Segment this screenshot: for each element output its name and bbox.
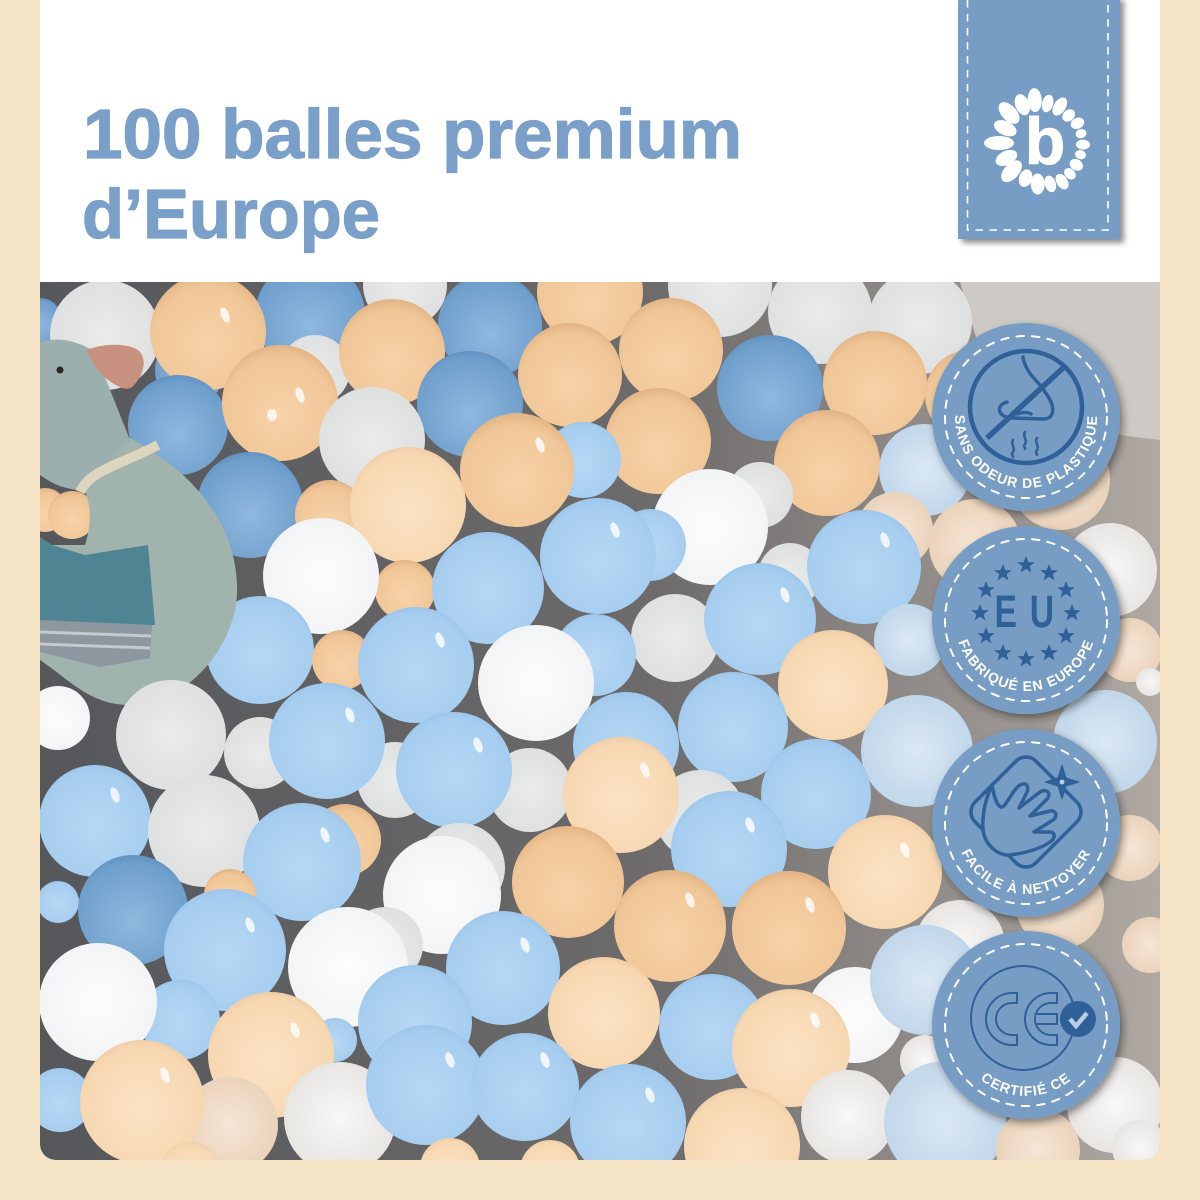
title: d’Europe	[82, 175, 380, 253]
icon: crossed-out nose	[970, 351, 1082, 463]
photo: ball pit with plush duck	[18, 233, 1178, 1200]
brand tag with flower logo	[958, 0, 1124, 243]
icon: EU stars: EU	[994, 587, 1054, 637]
badge: certifié CE	[930, 930, 1128, 1128]
badge: sans odeur de plastique: SANS ODEUR DE PLASTIQUE	[954, 415, 1098, 488]
plush duck toy	[40, 340, 237, 705]
title	[82, 95, 742, 253]
badge: fabriqué en Europe	[930, 525, 1128, 723]
title: 100 balles premium	[83, 95, 742, 173]
icon: flower logo: b	[1025, 104, 1065, 178]
icon: hand wiping a cloth	[965, 751, 1087, 873]
badge: facile à nettoyer: FACILE À NETTOYER	[962, 848, 1090, 894]
white header panel	[40, 0, 1160, 282]
badge: sans odeur de plastique	[930, 322, 1128, 520]
icon: flower logo	[984, 88, 1090, 195]
icon: EU stars	[971, 556, 1081, 666]
badge: certifié CE: CERTIFIÉ CE	[982, 1072, 1070, 1096]
badge: facile à nettoyer	[930, 728, 1128, 926]
icon: CE mark with check	[971, 966, 1096, 1070]
badge: fabriqué en Europe: FABRIQUÉ EN EUROPE	[958, 639, 1094, 692]
